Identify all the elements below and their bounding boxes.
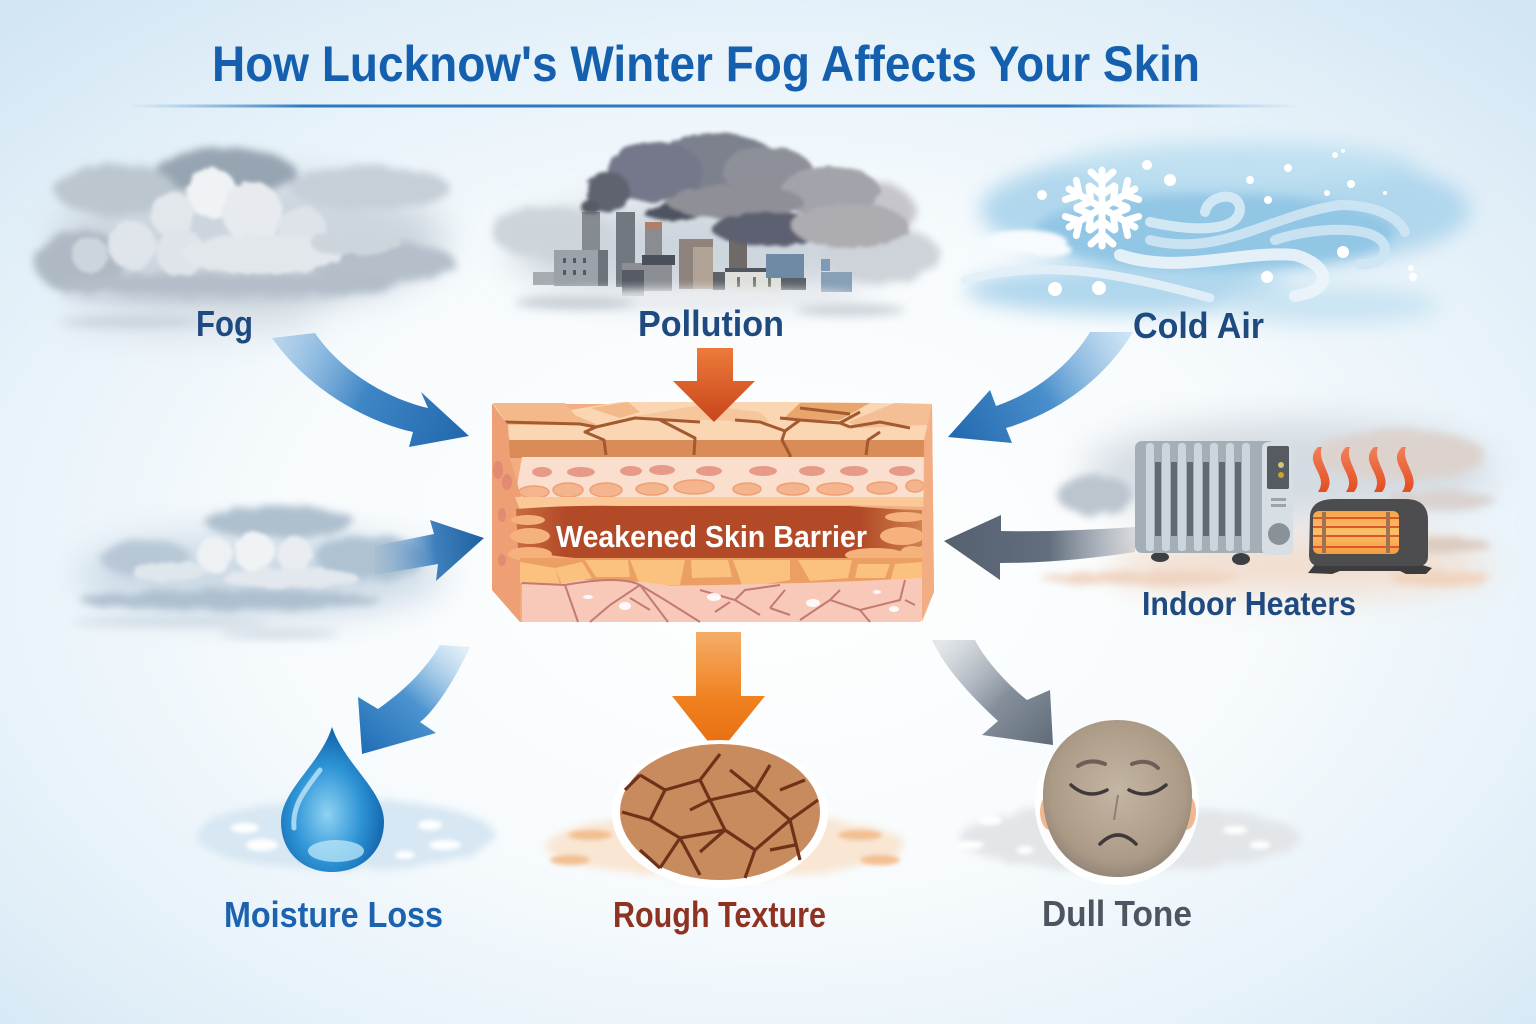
arrow: fog to skin [272,333,469,447]
panel: moisture loss [195,727,495,872]
light band [515,497,925,510]
pale cell layer [515,457,925,498]
arrow: cold air to skin [948,332,1133,443]
label: fog: Fog [196,303,253,344]
icon: cracked skin [612,740,828,888]
label: indoor heaters: Indoor Heaters [1142,585,1356,622]
label: moisture loss: Moisture Loss [224,894,443,935]
panel: indoor heaters backdrop [1040,420,1495,595]
panel: weakened skin barrier block [492,402,934,622]
yellow cell row [520,558,922,585]
arrow: pollution to skin [673,348,755,422]
arrow: skin to dull tone [932,640,1053,745]
crust layer [508,440,928,458]
wind swirls [965,197,1405,298]
icon: heat flames [1313,447,1414,492]
icon: electric heater [1308,499,1432,574]
dark band [516,506,922,560]
panel: dull tone [956,720,1300,885]
side face left [492,404,522,622]
arrow: skin to moisture loss [358,645,470,754]
arrow: skin to rough texture [672,632,765,754]
label: rough texture: Rough Texture [613,894,826,935]
panel: rough texture [545,740,905,888]
title: How Lucknow's Winter Fog Affects Your Skin [212,36,1200,92]
label: pollution: Pollution [638,303,784,344]
cracks [504,408,910,496]
snowflake [1063,170,1141,246]
label: weakened skin barrier: Weakened Skin Barrier [556,519,867,554]
icon: oil radiator [1135,441,1293,565]
panel: mid-left cloud [70,506,445,638]
panel: pollution factory [492,133,940,316]
icon: water drop [281,727,384,872]
side face right [922,404,934,622]
arrow: heaters to skin [944,515,1135,580]
label: cold air: Cold Air [1133,305,1264,346]
label: dull tone: Dull Tone [1042,893,1192,934]
arrow: cloud to skin [375,520,484,581]
panel: fog cloud [35,148,455,333]
panel: cold air [965,143,1470,325]
small cloud [983,230,1072,257]
pink layer [522,578,922,622]
icon: dull face [1035,720,1199,885]
top surface [493,402,932,440]
